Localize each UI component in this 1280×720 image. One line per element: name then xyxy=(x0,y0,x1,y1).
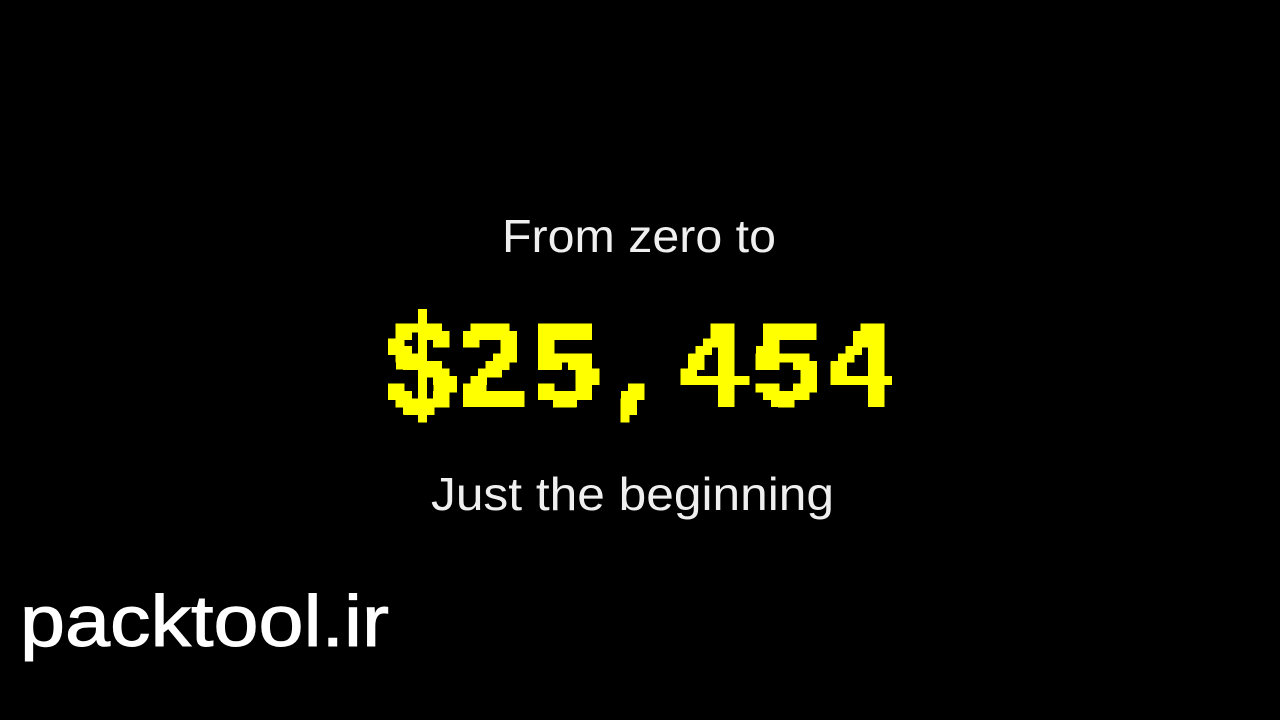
heading: from zero to: From zero to xyxy=(502,210,776,262)
amount: $25,454: 25,454 xyxy=(454,307,898,439)
amount: $25,454: $ xyxy=(384,299,458,453)
watermark: packtool.ir: packtool.ir xyxy=(20,582,389,662)
subheading: just the beginning: Just the beginning xyxy=(431,468,834,520)
